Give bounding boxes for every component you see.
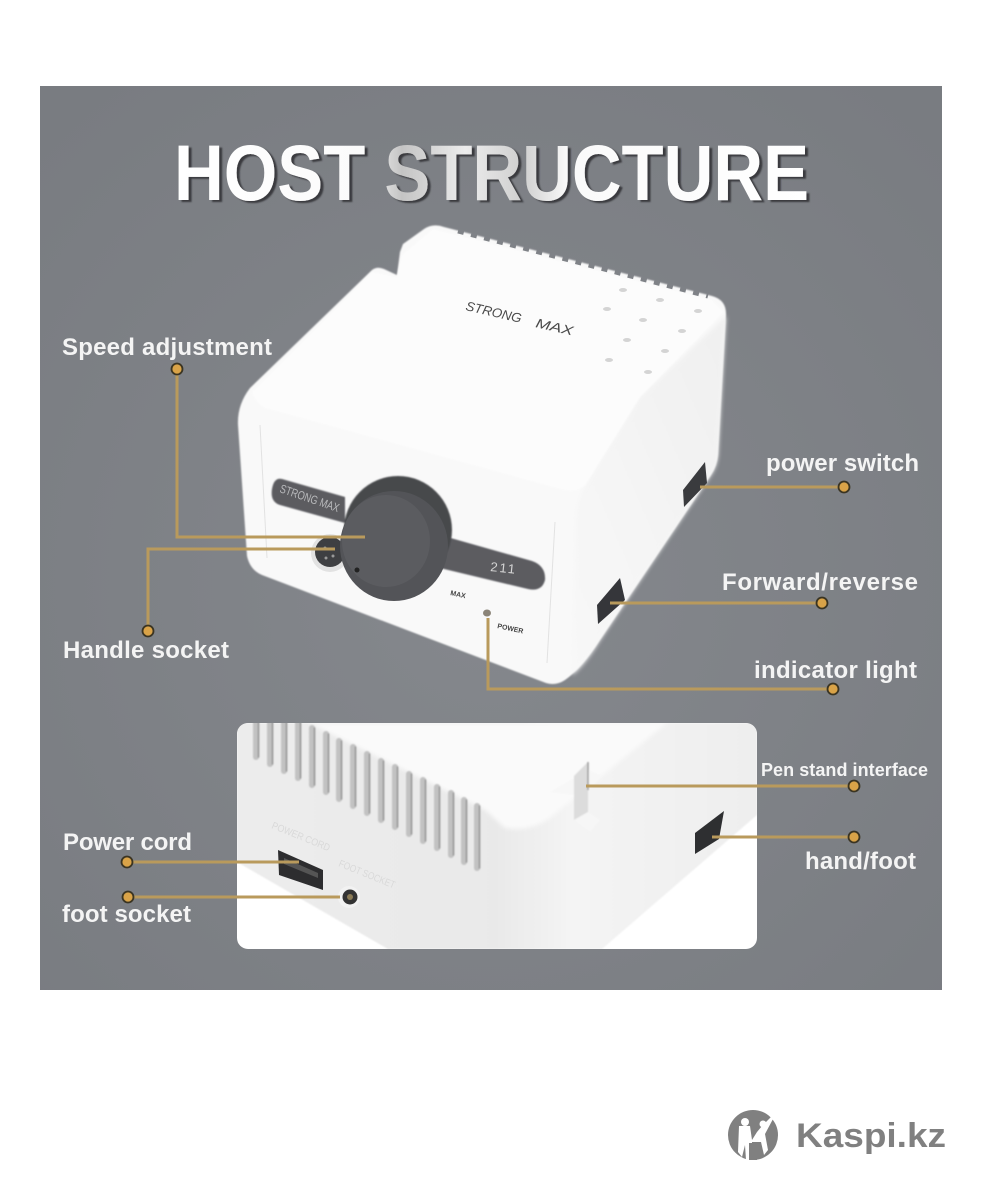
brand on top: MAX [534,315,576,339]
vent holes on top [603,288,702,374]
callout labels: hand/foot [805,848,916,875]
embossed socket labels [270,821,397,891]
pen stand notch [574,761,590,820]
icon: Kaspi logo [728,1110,778,1160]
panel: grey background [40,86,942,990]
brand on top [464,298,576,339]
callout labels: indicator light [754,657,917,684]
handle socket [311,534,349,572]
inset panel: rear view [237,722,757,949]
callout labels: Forward/reverse [722,569,918,596]
knob [340,491,448,601]
forward/reverse switch [597,578,625,624]
embossed socket labels: FOOT SOCKET [337,859,397,891]
vent ridge along the back edge [458,231,708,296]
Kaspi wordmark: Kaspi.kz [796,1117,946,1155]
title: HOST STRUCTURE [174,128,809,217]
callout lines [127,369,854,897]
plate model number: 211 [490,559,518,577]
rear body [237,723,757,949]
device top face [252,229,724,491]
callout labels: Power cord [63,829,192,856]
foot socket [342,890,358,904]
device side face [572,316,726,675]
callout labels: Speed adjustment [62,334,272,361]
callout labels: Pen stand interface [761,760,928,780]
callout labels: foot socket [62,901,191,928]
plate brand text: STRONG MAX [278,482,341,515]
device body outline [238,225,726,684]
brand on top: STRONG [464,298,523,326]
POWER label: POWER [497,623,524,635]
rear top surface [309,723,667,829]
cooling fins [256,722,480,868]
hand/foot switch [695,811,724,854]
callout labels: power switch [766,450,919,477]
power cord socket [278,850,323,890]
front label frame [260,425,555,663]
callout labels: Handle socket [63,637,229,664]
inset background [237,723,757,949]
dark control plate [272,476,545,590]
power switch [683,462,707,507]
callout labels [62,334,928,928]
power LED [483,610,491,616]
MAX label: MAX [450,590,467,600]
embossed socket labels: POWER CORD [270,821,331,854]
callout dots [122,364,860,902]
device: main unit illustration [238,225,726,684]
